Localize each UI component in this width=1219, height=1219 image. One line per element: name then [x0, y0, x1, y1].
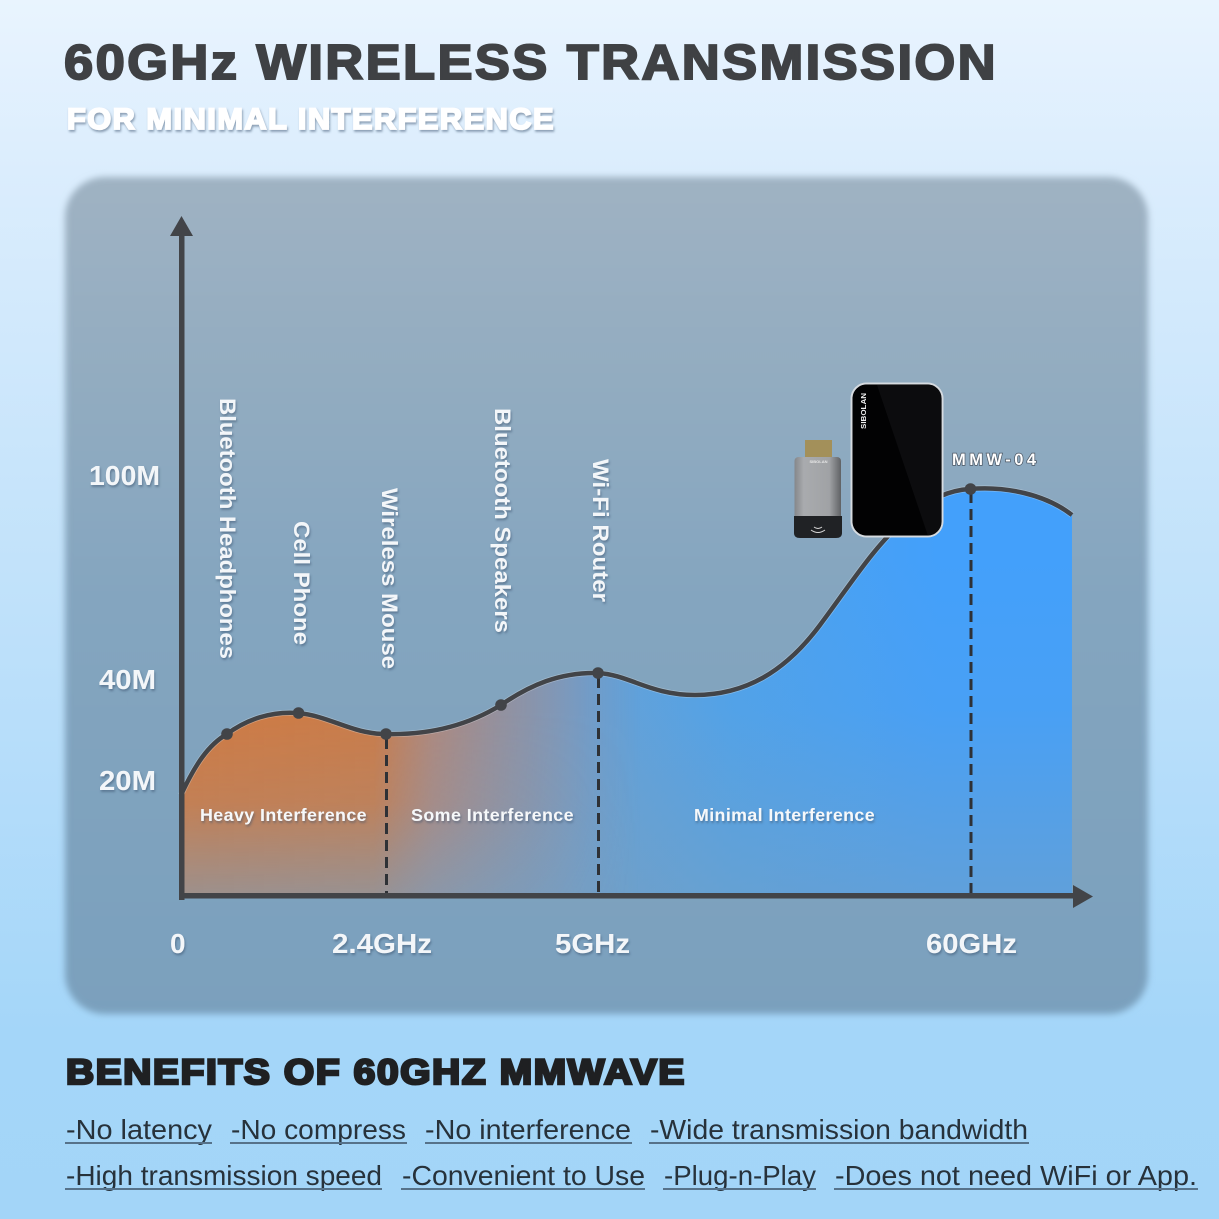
- area chart: interference by frequency: [181, 488, 1072, 895]
- interference zone labels: Minimal Interference: [694, 805, 875, 825]
- dashed marker lines: [386, 492, 971, 894]
- interference zone labels: Some Interference: [411, 805, 574, 825]
- benefits row 2: [66, 1160, 1197, 1191]
- area fill: orange: [184, 676, 608, 893]
- icon: HDMI dongle: [794, 440, 842, 538]
- title: 60GHz WIRELESS TRANSMISSION: [64, 36, 998, 90]
- curve line: [181, 488, 1072, 795]
- benefits row 1: -No latency: [66, 1114, 212, 1145]
- benefits row 1: -Wide transmission bandwidth: [650, 1114, 1028, 1145]
- device labels, rotated: Cell Phone: [289, 521, 314, 645]
- benefits row 1: [66, 1114, 1028, 1145]
- interference zone labels: [200, 805, 875, 825]
- x axis labels: 2.4GHz: [332, 928, 432, 959]
- benefits row 2 underlines: [65, 1188, 1198, 1190]
- device labels, rotated: Wireless Mouse: [377, 488, 402, 669]
- icon: black receiver box: SIBOLAN: [861, 393, 868, 429]
- x axis labels: 60GHz: [926, 928, 1017, 959]
- curve data points: [221, 483, 976, 740]
- device labels, rotated: [215, 398, 613, 669]
- panel: chart background: [65, 177, 1148, 1014]
- benefits row 1 underlines: [65, 1142, 1029, 1144]
- x axis labels: 0: [170, 928, 186, 959]
- benefits row 2: -Plug-n-Play: [664, 1160, 816, 1191]
- icon: black receiver box: [852, 384, 942, 536]
- benefits row 2: -High transmission speed: [66, 1160, 382, 1191]
- y axis labels: 40M: [99, 664, 156, 695]
- benefits row 2: -Does not need WiFi or App.: [835, 1160, 1197, 1191]
- device labels, rotated: Wi-Fi Router: [588, 459, 613, 602]
- x axis labels: 5GHz: [555, 928, 630, 959]
- curve highlight: [181, 488, 1072, 795]
- benefits row 2: -Convenient to Use: [402, 1160, 645, 1191]
- device labels, rotated: Bluetooth Headphones: [215, 398, 240, 659]
- y axis labels: 20M: [99, 765, 156, 796]
- heading: benefits: BENEFITS OF 60GHZ MMWAVE: [66, 1053, 686, 1092]
- model label: MMW-04: [952, 451, 1040, 469]
- subtitle: FOR MINIMAL INTERFERENCE: [67, 103, 555, 136]
- x axis labels: [170, 928, 1017, 959]
- benefits row 1: -No compress: [231, 1114, 406, 1145]
- y axis labels: [89, 460, 160, 796]
- area fill: blue: [181, 488, 1072, 895]
- y axis labels: 100M: [89, 460, 160, 491]
- y axis with arrow: [170, 216, 193, 900]
- x axis with arrow: [179, 885, 1093, 908]
- device labels, rotated: Bluetooth Speakers: [490, 408, 515, 633]
- icon: HDMI dongle: SIBOLAN: [810, 459, 828, 464]
- benefits row 1: -No interference: [425, 1114, 631, 1145]
- interference zone labels: Heavy Interference: [200, 805, 367, 825]
- area fill: vertical fade: [181, 488, 1072, 895]
